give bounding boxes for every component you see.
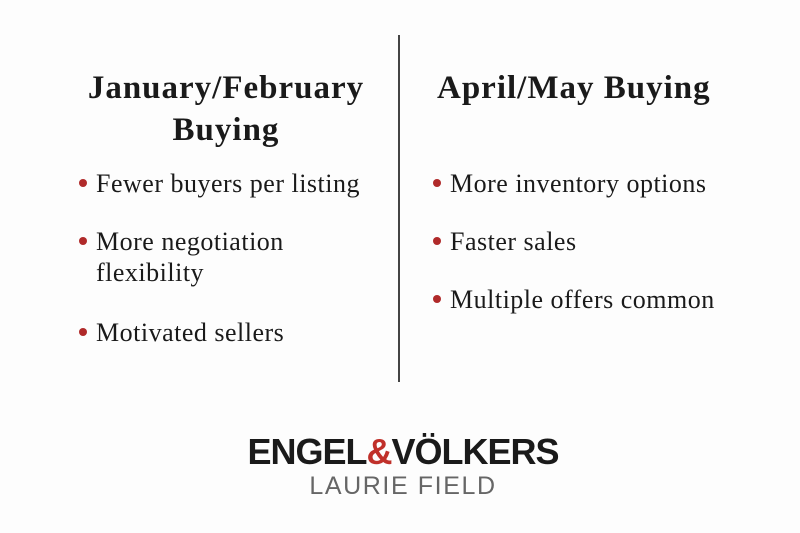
bullet: multiple offers: Multiple offers common xyxy=(450,285,715,314)
bullet: motivated sellers: Motivated sellers xyxy=(96,318,284,347)
divider xyxy=(398,35,400,382)
logo subtitle: LAURIE FIELD xyxy=(309,472,497,500)
list: right bullets xyxy=(433,169,715,314)
bullet: negotiation xyxy=(79,227,284,287)
bullet: faster sales: Faster sales xyxy=(450,227,577,256)
title: left column: January/February xyxy=(88,70,364,106)
bullet: negotiation: More negotiation xyxy=(96,227,284,256)
bullet: fewer buyers: Fewer buyers per listing xyxy=(96,169,360,198)
logo wordmark: ENGEL&VÖLKERS xyxy=(247,431,559,472)
title: left column: Buying xyxy=(173,112,279,148)
bullet: negotiation: flexibility xyxy=(96,258,204,287)
list: left bullets xyxy=(79,169,360,347)
logo xyxy=(247,431,559,500)
title: left column xyxy=(88,70,364,148)
bullet: inventory: More inventory options xyxy=(450,169,707,198)
title: right column: April/May Buying xyxy=(437,70,711,106)
